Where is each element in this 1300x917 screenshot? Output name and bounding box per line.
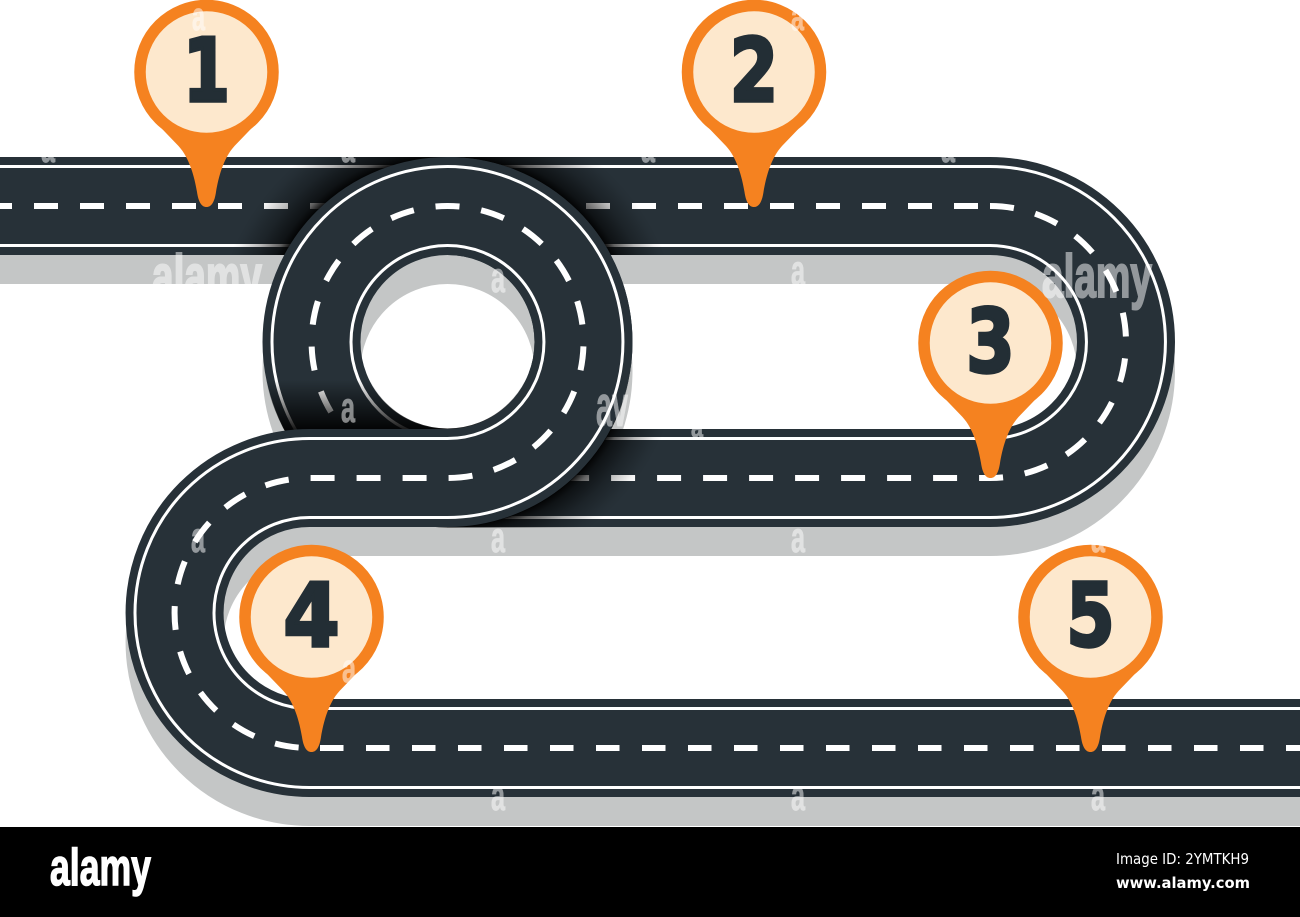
watermarks: a bbox=[1091, 772, 1106, 820]
road drop shadow bbox=[0, 235, 1300, 777]
website: www.alamy.com bbox=[1116, 874, 1250, 892]
pin 5: 5 bbox=[1066, 565, 1115, 667]
watermarks: a bbox=[491, 254, 506, 302]
watermarks: av bbox=[596, 374, 628, 439]
pin 3 bbox=[924, 276, 1057, 478]
watermarks: a bbox=[41, 124, 56, 172]
watermarks: a bbox=[341, 384, 356, 432]
watermarks: a bbox=[691, 411, 703, 444]
pin 3: 3 bbox=[966, 291, 1015, 393]
watermarks: a bbox=[341, 124, 356, 172]
pin 4 bbox=[245, 550, 378, 752]
pin 4: 4 bbox=[283, 565, 340, 667]
watermarks: a bbox=[1091, 514, 1106, 562]
pin 2: 2 bbox=[730, 20, 778, 122]
pin 1: 1 bbox=[183, 22, 230, 122]
road: upper section passing under the loop bbox=[0, 166, 1165, 518]
watermarks: a bbox=[941, 124, 956, 172]
road: circular loop bbox=[272, 166, 623, 518]
watermarks: alamy bbox=[1042, 243, 1152, 310]
image id: Image ID: 2YMTKH9 bbox=[1116, 850, 1249, 868]
footer bar bbox=[0, 827, 1300, 917]
cast shadow of the loop on the road bbox=[238, 157, 657, 528]
footer logo: alamy bbox=[50, 839, 151, 897]
watermarks: a bbox=[791, 772, 806, 820]
watermarks: a bbox=[342, 647, 356, 691]
watermarks bbox=[41, 0, 1152, 820]
watermarks: a bbox=[641, 124, 656, 172]
pin 5 bbox=[1024, 550, 1157, 752]
watermarks: a bbox=[791, 247, 806, 295]
pin 2 bbox=[688, 6, 820, 207]
road: S-curve continuing to the lower straight bbox=[135, 166, 1300, 788]
watermarks: a bbox=[491, 514, 506, 562]
watermarks: a bbox=[191, 514, 206, 562]
watermarks: alamy bbox=[152, 243, 262, 310]
pin 1 bbox=[140, 6, 273, 207]
watermarks: a bbox=[791, 514, 806, 562]
watermarks: a bbox=[491, 772, 506, 820]
